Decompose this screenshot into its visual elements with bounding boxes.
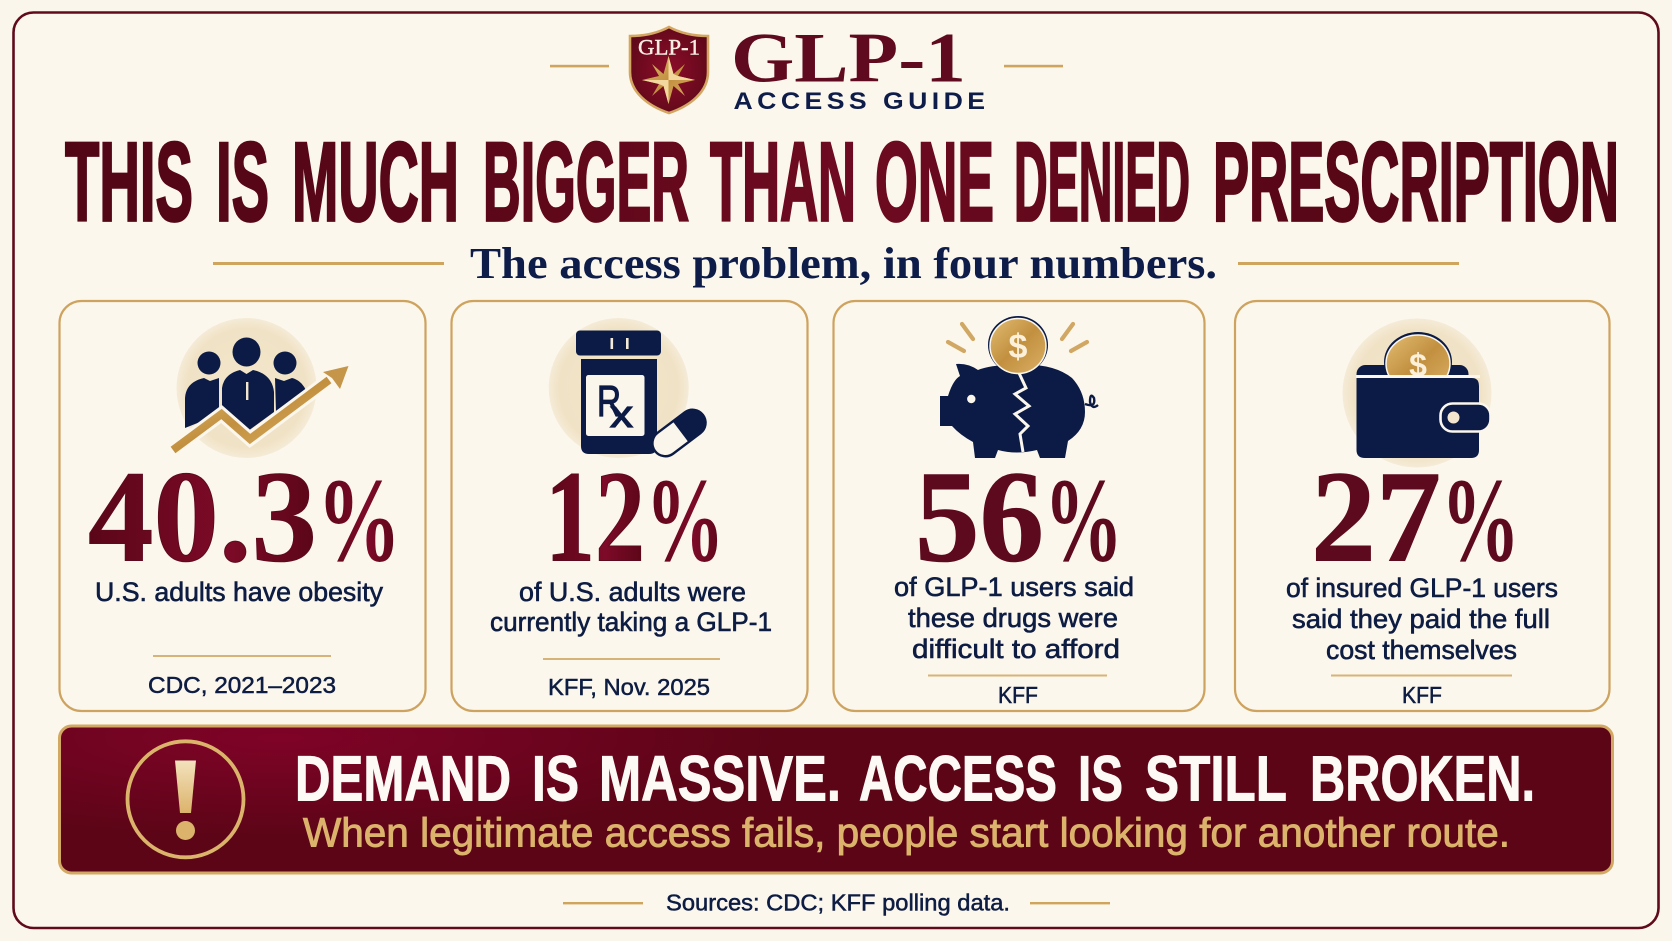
label text: of insured GLP-1 users [1286,573,1558,603]
callout headline [295,742,1535,814]
header logo block [550,20,1063,115]
panel: currently taking stat [452,301,808,711]
icon: wallet with coin: $ [1409,347,1427,383]
stat: 56%: % [1044,454,1123,586]
stat: 56% [915,444,1123,590]
stat: 40.3%: 40.3 [88,444,317,590]
label text: of GLP-1 users said [894,572,1134,602]
source: KFF [998,682,1038,708]
icon: broken piggy bank with coin [940,316,1098,458]
icon: wallet with coin [1342,318,1492,468]
footer sources: Sources: CDC; KFF polling data. [666,890,1010,916]
main headline: THIS [65,120,193,244]
label text [1286,573,1558,665]
source: KFF, Nov. 2025 [548,674,710,700]
label text [894,572,1134,664]
main headline: IS [216,120,269,244]
callout banner [60,726,1612,873]
main headline: DENIED [1014,120,1190,244]
callout headline: ACCESS [859,742,1057,814]
label text: currently taking a GLP-1 [490,607,772,637]
label text: U.S. adults have obesity [95,577,384,607]
icon: prescription bottle and pill [549,318,711,461]
callout subtext: When legitimate access fails, people start looking for another route. [303,810,1510,856]
logo subtitle: ACCESS GUIDE [734,88,990,115]
stat: 27% [1311,444,1520,590]
main headline: ONE [875,120,994,244]
subheading [213,239,1459,288]
logo wordmark: GLP-1 [731,20,966,98]
panel: paid full cost stat [1235,301,1610,711]
callout headline: IS [1078,742,1123,814]
panel: difficult to afford stat [834,301,1204,711]
stat: 27%: 27 [1311,444,1441,590]
main headline: MUCH [292,120,459,244]
icon: people with rising arrow [173,318,348,458]
icon: prescription bottle and pill: x [610,394,633,436]
stat: 27%: % [1441,454,1520,586]
label text [490,577,772,637]
stat: 40.3%: % [317,454,401,586]
stat: 12%: 12 [545,444,645,590]
source: KFF [1402,682,1442,708]
source: CDC, 2021–2023 [148,672,336,698]
label text: these drugs were [908,603,1118,633]
icon: broken piggy bank with coin: $ [1009,328,1028,366]
icon: shield with compass star [630,27,708,113]
icon: shield with compass star: GLP-1 [638,34,700,60]
main headline: THAN [710,120,856,244]
subheading: The access problem, in four numbers. [470,239,1217,288]
callout headline: IS [532,742,579,814]
stat: 12%: % [646,454,724,586]
callout headline: DEMAND [295,742,511,814]
callout headline: BROKEN. [1310,742,1535,814]
main headline: BIGGER [483,120,689,244]
label text: said they paid the full [1292,604,1550,634]
label text: of U.S. adults were [519,577,746,607]
callout headline: STILL [1145,742,1287,814]
label text: cost themselves [1326,635,1517,665]
icon: prescription bottle and pill: R [597,377,621,426]
icon: exclamation circle [128,741,244,857]
panel: obesity stat [60,301,426,711]
stat: 56%: 56 [915,444,1044,590]
callout headline: MASSIVE. [599,742,841,814]
main headline [65,120,1619,244]
label text: difficult to afford [912,634,1120,664]
